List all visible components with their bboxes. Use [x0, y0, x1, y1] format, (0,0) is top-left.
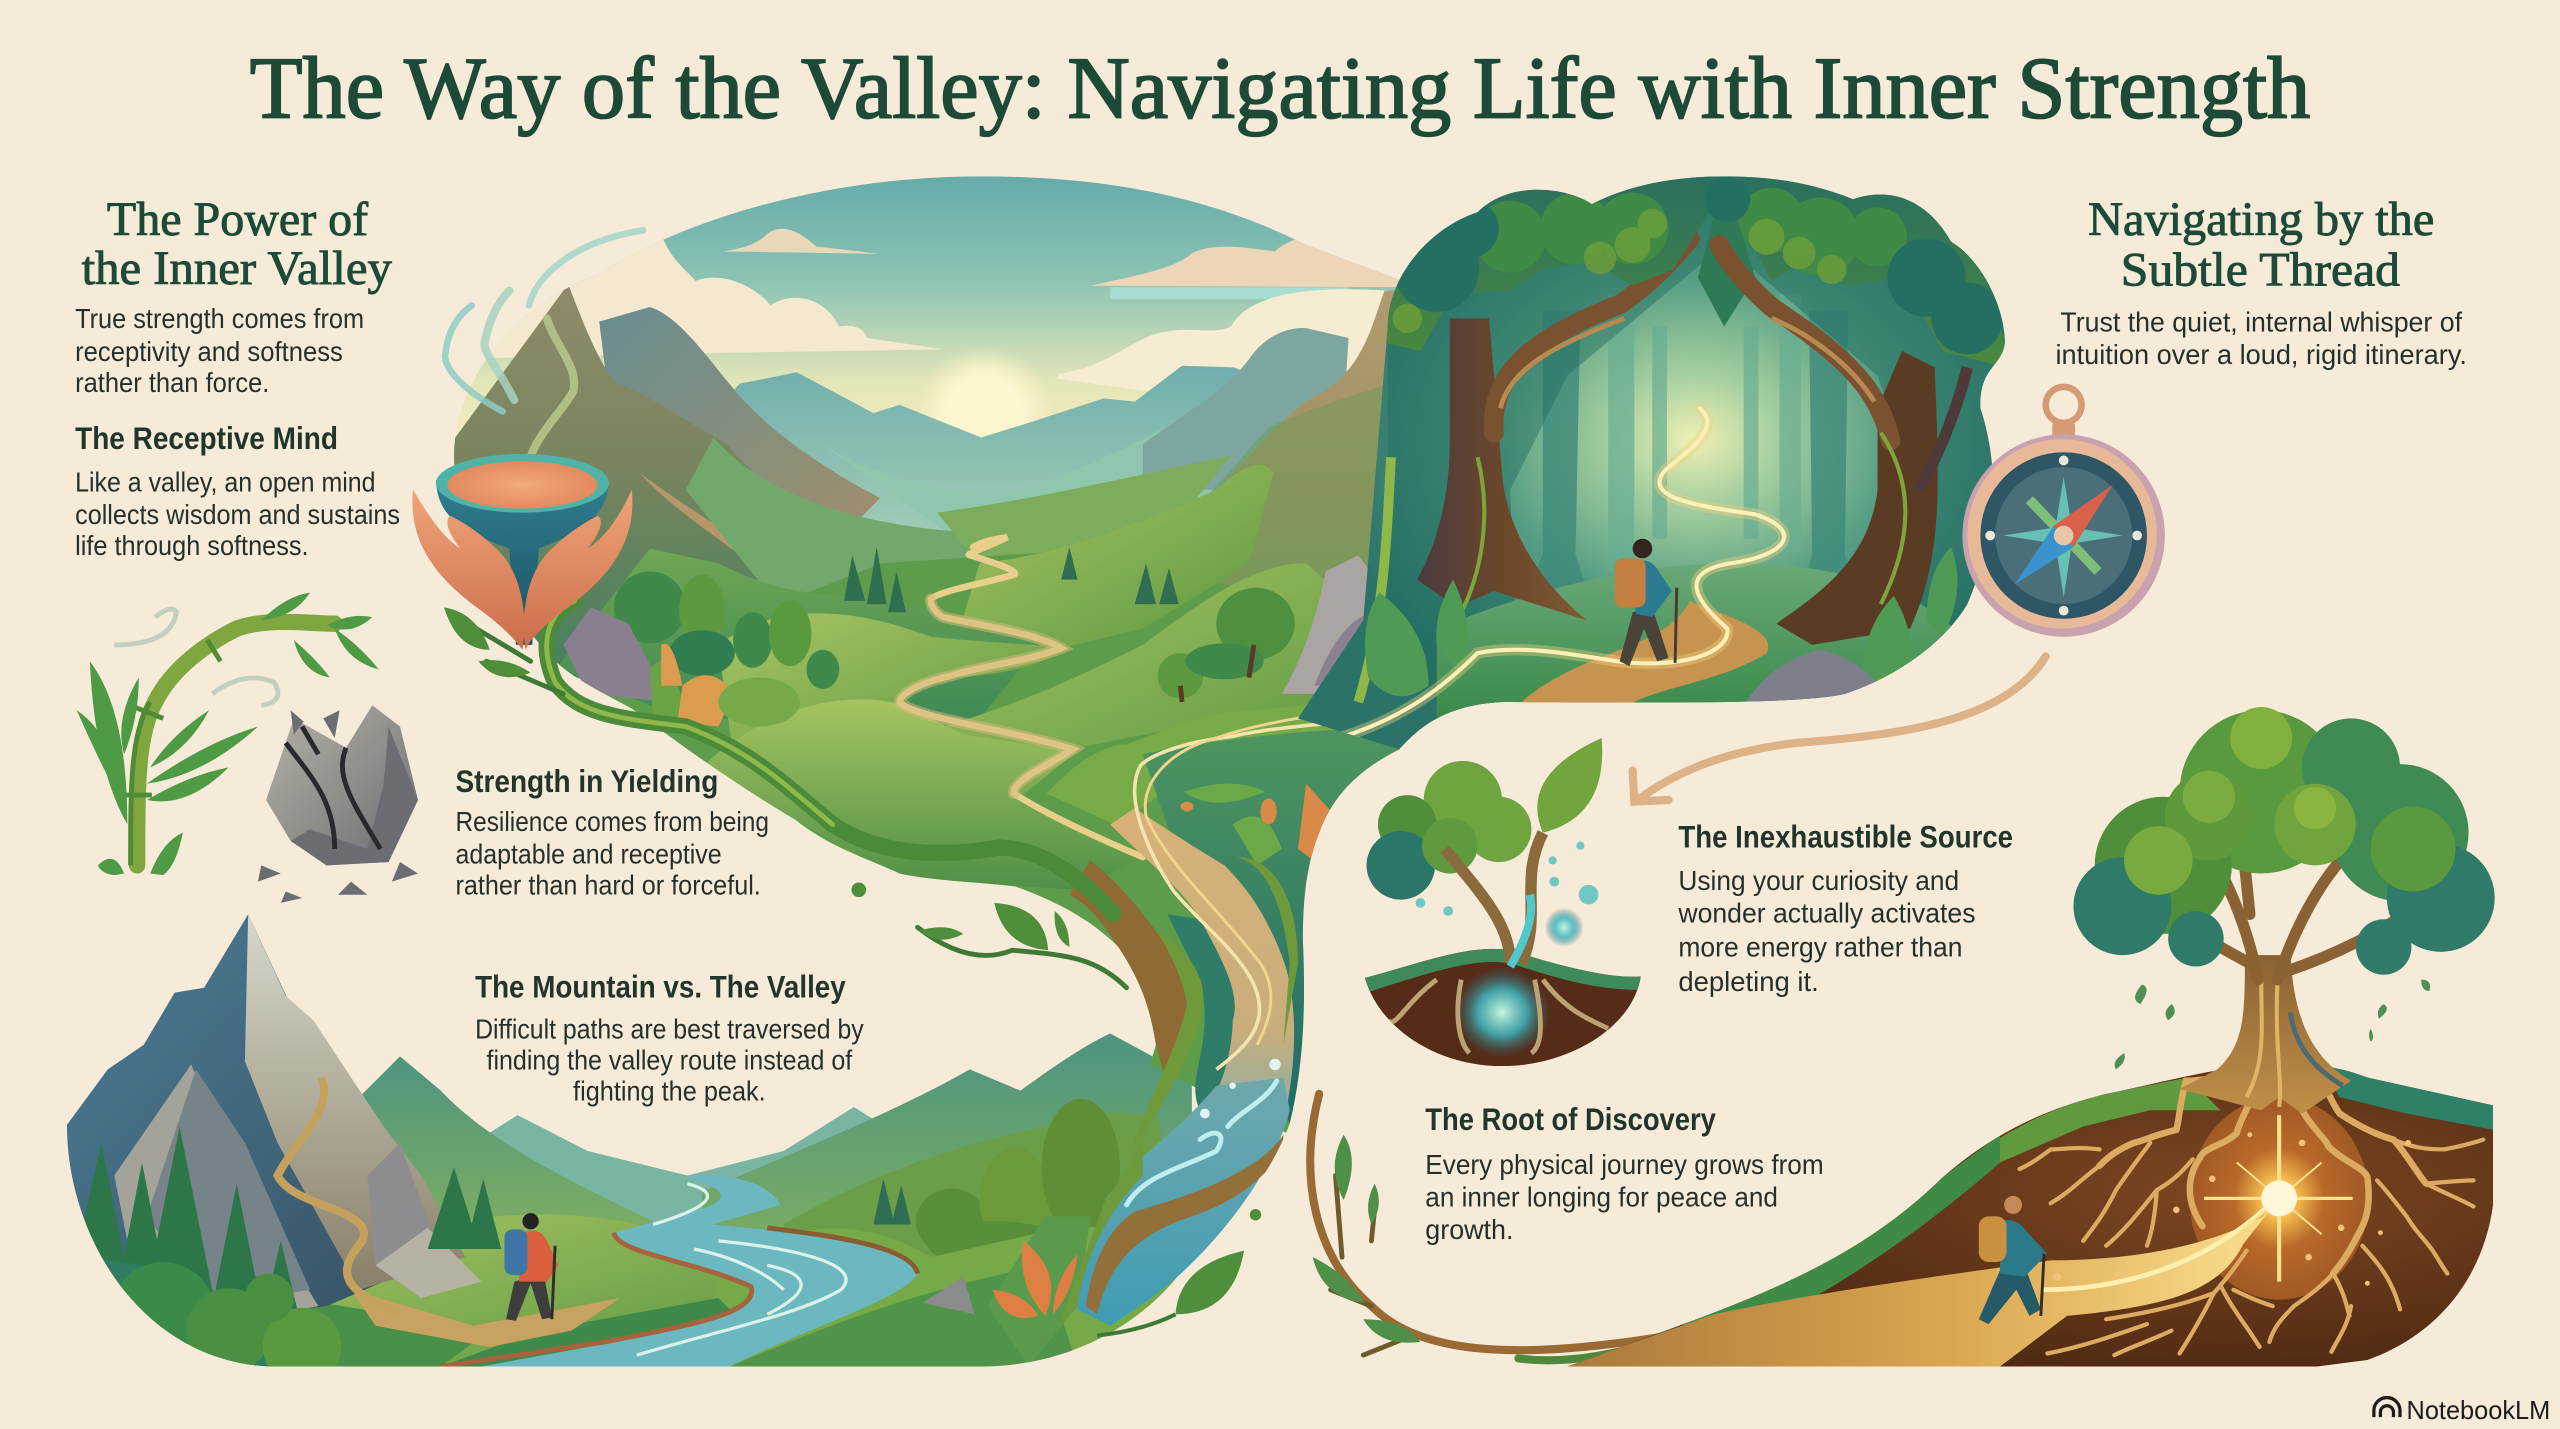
- text block: strength in yielding: Strength in Yielding: [456, 764, 718, 799]
- icon: bowl held by hands: [412, 454, 632, 650]
- logo: NotebookLM: NotebookLM: [2407, 1395, 2550, 1425]
- text block: strength in yielding: rather than hard or forceful.: [456, 870, 761, 901]
- text block: navigating by the subtle thread: Subtle Thread: [2121, 245, 2400, 297]
- panel: mountain and river: [67, 914, 1192, 1386]
- text block: root of discovery: [1425, 1102, 1824, 1245]
- text block: mountain vs valley: finding the valley route instead of: [487, 1044, 852, 1075]
- title: The Way of the Valley: Navigating Life with Inner Strength: [250, 40, 2310, 138]
- text block: power of the inner valley: The Power of: [107, 194, 368, 246]
- icon: hiker in forest: [1615, 539, 1677, 666]
- text block: the receptive mind: life through softness.: [75, 530, 309, 561]
- icon: branch leaves: [1313, 1135, 1420, 1343]
- icon: hiker with blue pack: [504, 1213, 558, 1321]
- text block: inexhaustible source: Using your curiosity and: [1678, 865, 1959, 896]
- panel: root tree: [1551, 707, 2514, 1371]
- text block: power of the inner valley: rather than force.: [75, 367, 269, 398]
- icon: vine from bowl: [457, 601, 1127, 988]
- text block: inexhaustible source: The Inexhaustible Source: [1678, 819, 2013, 854]
- icon: hiker on trail: [1979, 1196, 2047, 1324]
- text block: power of the inner valley: the Inner Valley: [82, 243, 392, 295]
- text block: navigating by the subtle thread: intuition over a loud, rigid itinerary.: [2056, 339, 2467, 370]
- text block: inexhaustible source: depleting it.: [1678, 966, 1819, 997]
- text block: navigating by the subtle thread: Navigating by the: [2088, 194, 2434, 246]
- text block: inexhaustible source: [1677, 819, 2013, 997]
- text block: the receptive mind: collects wisdom and sustains: [75, 499, 400, 530]
- icon: compass: [1962, 387, 2165, 637]
- text block: strength in yielding: adaptable and receptive: [456, 839, 722, 870]
- panel: sprout tree: [1355, 738, 1649, 1069]
- text block: navigating by the subtle thread: Trust the quiet, internal whisper of: [2060, 306, 2462, 337]
- text block: root of discovery: growth.: [1425, 1214, 1513, 1245]
- text block: inexhaustible source: more energy rather than: [1678, 932, 1962, 963]
- icon: steam: [445, 230, 643, 483]
- panel: valley landscape: [441, 163, 1453, 1355]
- panel: root branch: [1310, 1094, 1698, 1360]
- text block: root of discovery: The Root of Discovery: [1425, 1102, 1717, 1137]
- text block: power of the inner valley: [75, 194, 392, 398]
- text block: power of the inner valley: receptivity and softness: [75, 336, 343, 367]
- text block: the receptive mind: The Receptive Mind: [75, 421, 338, 456]
- text block: root of discovery: an inner longing for peace and: [1425, 1182, 1778, 1213]
- icon: orange leaves: [993, 1241, 1078, 1318]
- text block: the receptive mind: [75, 421, 400, 561]
- icon: cracked rock: [258, 705, 418, 903]
- panel: forest: [1290, 163, 2024, 751]
- arrow: compass to sprout: [1633, 656, 2046, 802]
- text block: inexhaustible source: wonder actually activates: [1677, 897, 1976, 928]
- band: golden path to river: [1057, 716, 1400, 1330]
- text block: strength in yielding: [456, 764, 769, 901]
- text block: mountain vs valley: [475, 970, 864, 1106]
- text block: power of the inner valley: True strength comes from: [75, 303, 364, 334]
- text block: mountain vs valley: fighting the peak.: [573, 1075, 766, 1106]
- text block: the receptive mind: Like a valley, an open mind: [75, 466, 376, 497]
- text block: root of discovery: Every physical journey grows from: [1425, 1149, 1824, 1180]
- text block: strength in yielding: Resilience comes from being: [456, 806, 769, 837]
- text block: navigating by the subtle thread: [2056, 194, 2467, 370]
- text block: mountain vs valley: Difficult paths are best traversed by: [475, 1013, 864, 1044]
- icon: vine leaves: [444, 607, 1261, 1336]
- icon: bamboo: [77, 593, 379, 875]
- text block: mountain vs valley: The Mountain vs. The Valley: [475, 970, 846, 1005]
